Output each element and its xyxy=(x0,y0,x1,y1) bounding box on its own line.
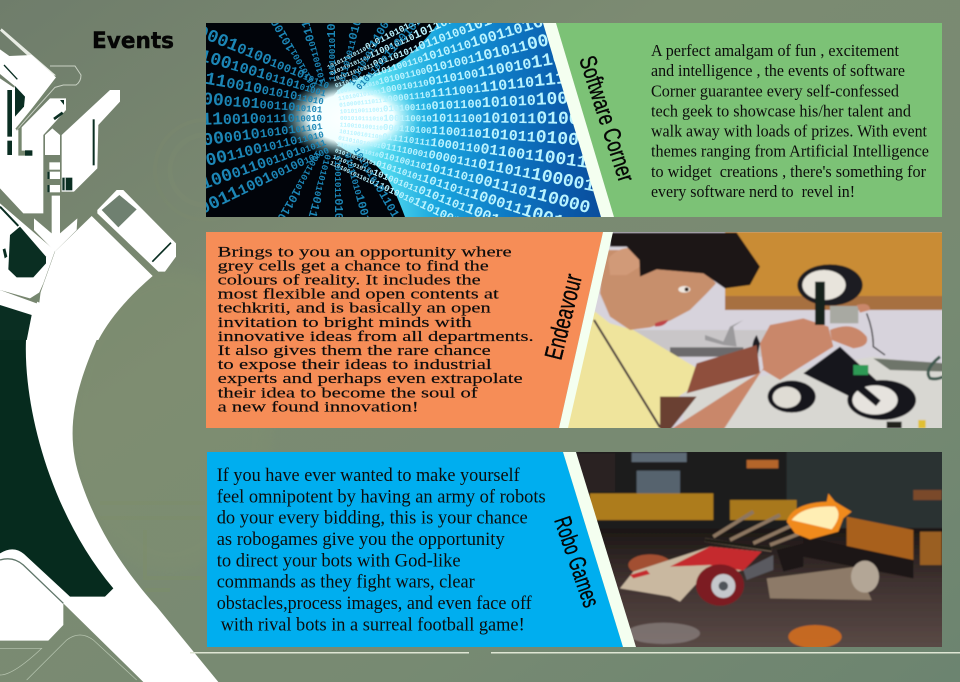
photo: boy building a robot xyxy=(563,230,947,430)
text block: Endeavour description: invitation to bright minds with xyxy=(218,315,473,331)
upper circuit blocks xyxy=(0,28,176,340)
text block: Endeavour description: to expose their ideas to industrial xyxy=(218,357,492,373)
binary digits top and bottom: 1101001010110 xyxy=(325,2,339,81)
text block: Software Corner description xyxy=(651,41,929,201)
binary digits left: 010001010011010101 xyxy=(180,89,324,119)
lower swoosh xyxy=(0,340,218,682)
binary digits top and bottom: 1010110101101 xyxy=(350,145,402,221)
photo: flame-throwing combat robot xyxy=(570,450,945,650)
binary digits left: 010010010110101001 xyxy=(187,44,329,102)
text block: Endeavour description: their idea to become the soul of xyxy=(218,385,478,401)
text block: Endeavour description: Brings to you an opportunity where xyxy=(218,244,512,260)
text block: Robo Games description: with rival bots in a surreal football game! xyxy=(221,614,525,635)
text block: Endeavour description: most flexible and open contents at xyxy=(218,287,499,303)
binary digits left: 000101001001010110 xyxy=(194,23,333,94)
text block: Endeavour description: colours of reality. It includes the xyxy=(218,272,481,288)
binary digits right: 1001010110101010011000101001101011001011 xyxy=(334,22,593,100)
blue text panel xyxy=(207,452,623,647)
binary digits right: 1010100110010101001100101100101010100101 xyxy=(339,88,601,119)
text block: Endeavour description: grey cells get a chance to find the xyxy=(218,258,489,274)
text block: Robo Games description: feel omnipotent by having an army of robots xyxy=(217,486,546,507)
text block: Robo Games description: as robogames give you the opportunity xyxy=(217,529,505,550)
binary digits right: 1011001011000111101111000110011001100110 xyxy=(338,119,599,175)
binary digits top and bottom: 1001101010110 xyxy=(273,148,325,224)
binary digits top and bottom: 010110101100101 xyxy=(352,14,425,93)
binary digits right: 1100101001100001101001100110101011010010 xyxy=(339,112,601,153)
binary digits left: 001100100111010010 xyxy=(179,107,322,132)
text block: Robo Games description: commands as they fight wars, clear xyxy=(217,572,475,593)
text block: Robo Games description: If you have ever wanted to make yourself xyxy=(217,465,520,486)
binary digits top and bottom: 0101011001100 xyxy=(301,153,335,233)
text block: Endeavour description xyxy=(218,244,534,415)
left decorative circuit graphic xyxy=(0,28,218,682)
binary digits right: 1010110101101010010110101101100101100010 xyxy=(330,145,580,261)
title: Events: Events xyxy=(92,29,174,54)
text block: Robo Games description: do your every bidding, this is your chance xyxy=(217,508,528,529)
text block: Software Corner description: tech geek to showcase his/her talent and xyxy=(651,101,911,120)
binary digits right: 0100001110111000011101111001110110111011 xyxy=(338,66,600,113)
binary digits top and bottom: 0101101010010 xyxy=(341,151,375,231)
text block: Software Corner description: walk away with loads of prizes. With event xyxy=(651,122,927,141)
text block: Endeavour description: techkriti, and is basically an open xyxy=(218,301,492,317)
text block: Endeavour description: innovative ideas from all departments. xyxy=(218,329,534,345)
text block: Robo Games description: to direct your bots with God-like xyxy=(217,550,461,571)
photo: binary tunnel xyxy=(206,23,601,217)
heading: Software Corner: Software Corner xyxy=(573,53,639,185)
text block: Software Corner description: every software nerd to revel in! xyxy=(651,182,855,201)
binary digits right: 1101010110100101001101011101001110110000 xyxy=(335,132,592,219)
binary digits left: 001100100101011010 xyxy=(182,66,326,110)
white divider strip xyxy=(559,232,613,428)
white divider strip xyxy=(563,452,636,647)
text block: Endeavour description: experts and perhaps even extrapolate xyxy=(218,371,523,387)
heading: Endeavour: Endeavour xyxy=(540,271,588,362)
panel: Robo Games xyxy=(207,450,945,650)
binary digits left: 000011001011011010 xyxy=(183,123,326,177)
text block: Endeavour description: It also gives them the rare chance xyxy=(218,343,491,359)
binary digits top and bottom: 0110101101011 xyxy=(335,3,369,83)
binary digits top and bottom xyxy=(271,23,420,217)
binary digits right: 0101101101010101101011011011100011100110 xyxy=(333,139,586,240)
binary digits right: 0110101010111011001101010110100110101001 xyxy=(332,0,588,93)
green text panel xyxy=(556,23,942,217)
binary digits top and bottom: 0110100110100 xyxy=(268,15,320,91)
text block: Software Corner description: Corner guarantee every self-confessed xyxy=(651,81,899,100)
text block: Software Corner description: A perfect amalgam of fun , excitement xyxy=(651,41,899,60)
binary digits left xyxy=(206,26,329,212)
binary digits right: 1101001010011000101100110100110010110010 xyxy=(336,43,597,106)
binary digits right: 0010101110101001100101011100101011010010 xyxy=(340,106,601,130)
binary digits left: 010001100110101011 xyxy=(188,131,329,199)
binary digits right: 0110100101010111100010000111011011100001 xyxy=(337,126,597,197)
panel: Software Corner xyxy=(206,23,942,217)
binary digits right: 1101001011010110100101101001010110011001 xyxy=(327,151,571,282)
text block: Robo Games description: obstacles,process images, and even face off xyxy=(217,593,532,614)
text block: Robo Games description xyxy=(217,465,546,635)
binary digits left: 010000101010101101 xyxy=(180,115,324,155)
binary digits top and bottom: 11001011 01001 xyxy=(331,155,345,234)
text block: Endeavour description: a new found innovation! xyxy=(218,399,419,415)
binary digits top and bottom: 1011010111001 xyxy=(345,12,397,88)
panel: Endeavour xyxy=(206,230,947,430)
binary digits right xyxy=(327,23,594,217)
text block: Software Corner description: themes ranging from Artificial Intelligence xyxy=(651,142,929,161)
orange text panel xyxy=(206,232,603,428)
heading: Robo Games: Robo Games xyxy=(548,513,604,611)
binary digits top and bottom: 1010011001101 xyxy=(295,5,329,85)
white divider strip xyxy=(543,23,614,217)
text block: Software Corner description: to widget creations , there's something for xyxy=(651,162,926,181)
binary digits left: 001110010010010100 xyxy=(196,140,333,220)
bottom rule lines xyxy=(190,652,960,654)
text block: Software Corner description: and intelligence , the events of software xyxy=(651,61,905,80)
